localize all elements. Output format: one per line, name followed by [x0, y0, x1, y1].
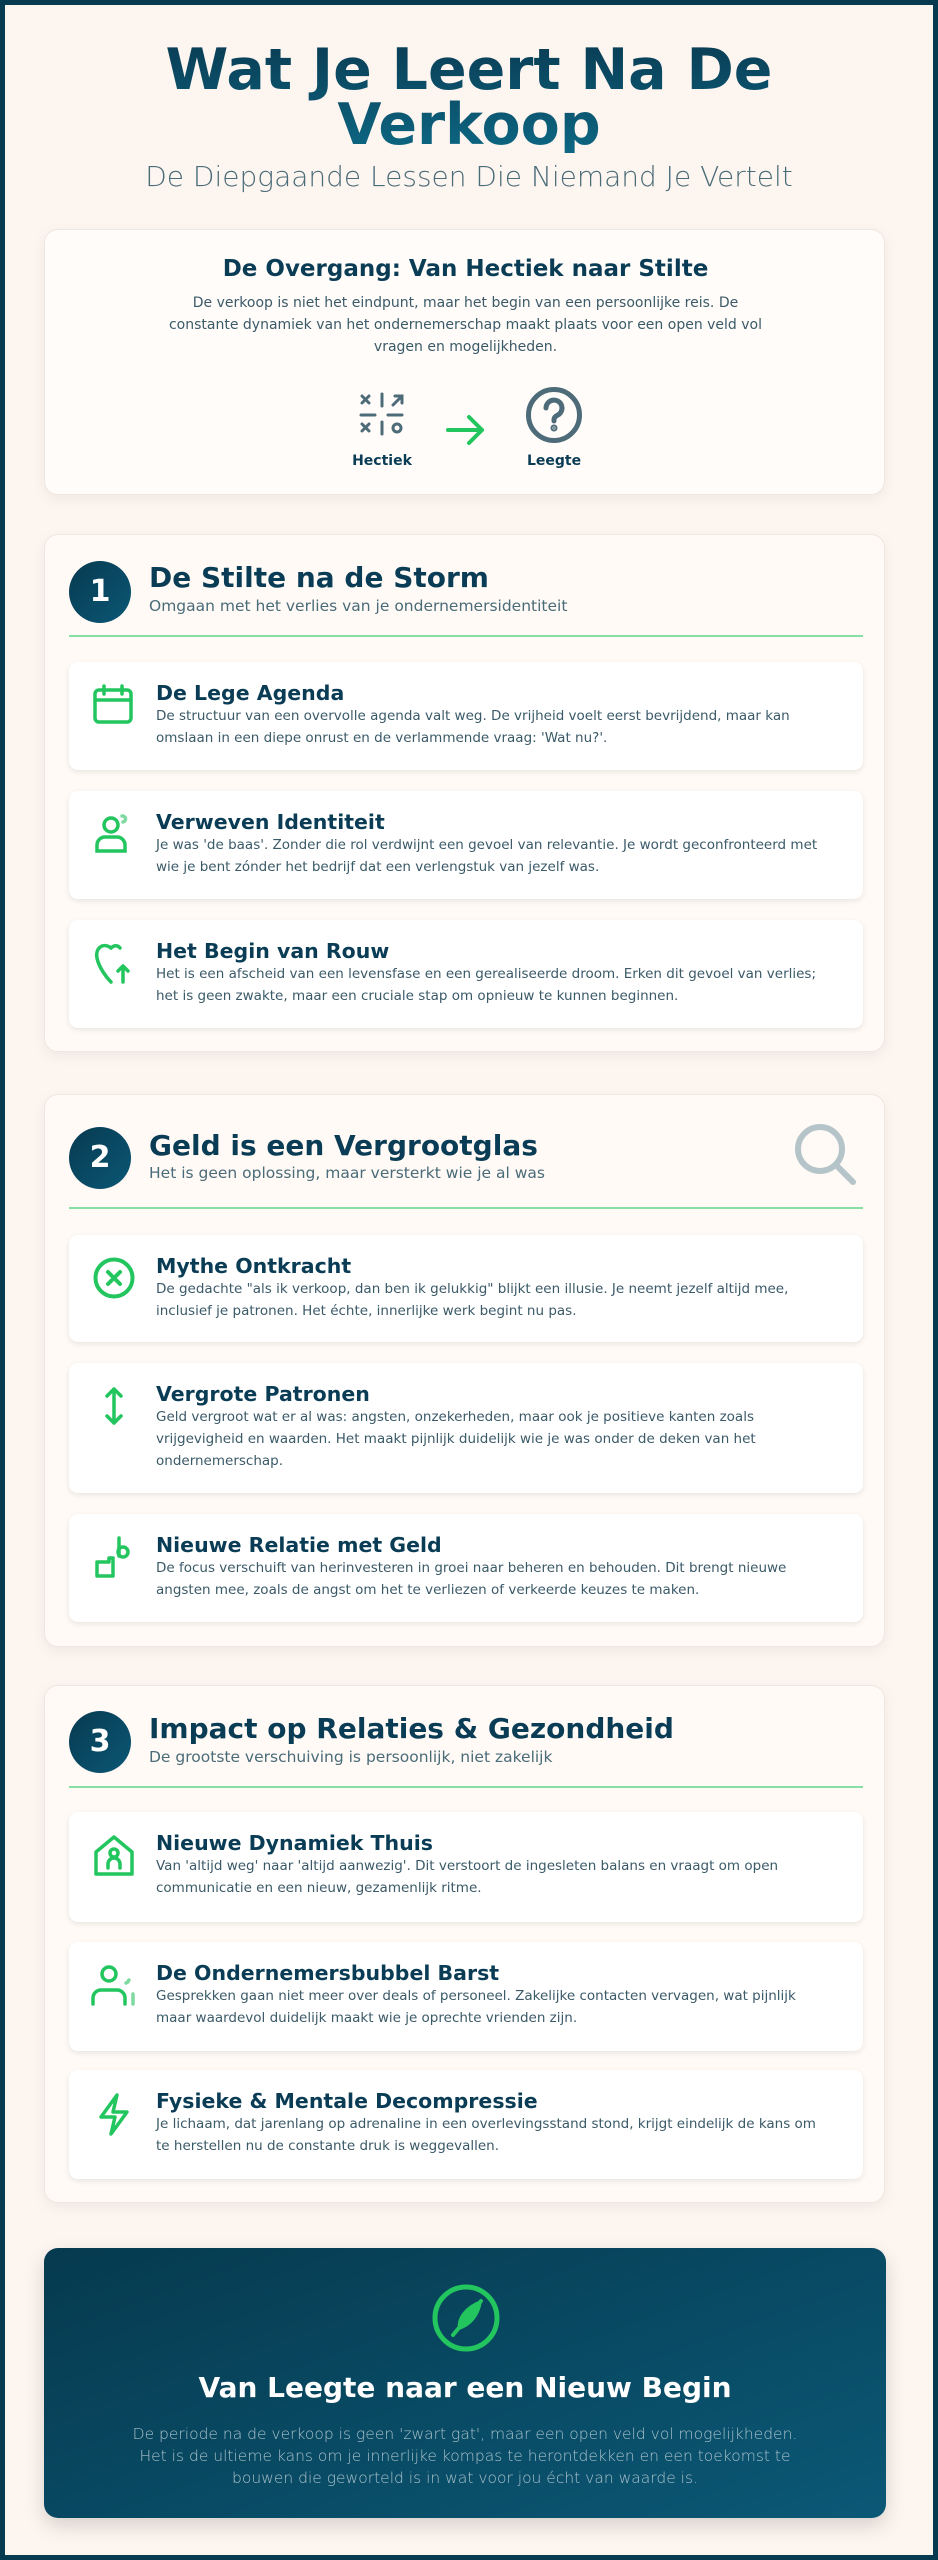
icon: hand coin — [95, 1536, 130, 1578]
icon: x circle — [94, 1258, 134, 1298]
icon: people — [91, 1965, 135, 2006]
item: nieuwe dynamiek thuis: communicatie en een nieuw, gezamenlijk ritme. — [156, 1880, 482, 1896]
conclusion text — [133, 2425, 797, 2487]
section 3 subtitle: De grootste verschuiving is persoonlijk, niet zakelijk — [149, 1748, 552, 1766]
item: begin van rouw: Het is een afscheid van een levensfase en een gerealiseerde droom. Erken dit gevoel van verlies; — [156, 966, 816, 982]
intro text — [169, 295, 762, 355]
icon: up-down arrow — [105, 1387, 123, 1425]
item: verweven identiteit — [69, 791, 863, 899]
item: decompressie — [69, 2070, 863, 2179]
icon: house — [94, 1835, 134, 1876]
item: verweven identiteit: wie je bent zónder het bedrijf dat een verlengstuk van jezelf was. — [156, 859, 599, 875]
item: ondernemersbubbel: Gesprekken gaan niet meer over deals of personeel. Zakelijke contacten vervagen, wat pijnlijk — [156, 1988, 796, 2004]
item: mythe ontkracht: Mythe Ontkracht — [156, 1254, 351, 1278]
number 2: 2 — [90, 1140, 110, 1175]
icon: magnifier — [795, 1124, 856, 1185]
panel: section 2 — [44, 1094, 885, 1647]
number 3: 3 — [90, 1724, 110, 1759]
item: vergrote patronen: Vergrote Patronen — [156, 1382, 370, 1406]
section 2 subtitle: Het is geen oplossing, maar versterkt wie je al was — [149, 1164, 545, 1182]
item: begin van rouw — [69, 920, 863, 1028]
item: mythe ontkracht: De gedachte "als ik verkoop, dan ben ik gelukkig" blijkt een illusie. Je neemt jezelf altijd mee, — [156, 1281, 788, 1297]
item: vergrote patronen: vrijgevigheid en waarden. Het maakt pijnlijk duidelijk wie je was onder de deken van het — [156, 1431, 756, 1447]
item: nieuwe relatie met geld: Nieuwe Relatie met Geld — [156, 1533, 442, 1557]
item: begin van rouw: het is geen zwakte, maar een cruciale stap om opnieuw te kunnen beginnen. — [156, 988, 678, 1004]
title: Verkoop — [337, 92, 601, 158]
label hectiek: Hectiek — [352, 453, 412, 469]
icon: hectiek — [360, 392, 404, 436]
section 1 title: De Stilte na de Storm — [149, 561, 489, 594]
subtitle: De Diepgaande Lessen Die Niemand Je Vertelt — [145, 160, 793, 193]
number 3 — [69, 1711, 131, 1773]
item: verweven identiteit: Je was 'de baas'. Zonder die rol verdwijnt een gevoel van relevantie. Je wordt geconfronteerd met — [156, 837, 817, 853]
item: nieuwe relatie met geld: De focus verschuift van herinvesteren in groei naar beheren en behouden. Dit brengt nieuwe — [156, 1560, 786, 1576]
number 1 — [69, 561, 131, 623]
number 2 — [69, 1127, 131, 1189]
icon: lightning — [99, 2093, 129, 2136]
item: nieuwe dynamiek thuis: Nieuwe Dynamiek Thuis — [156, 1831, 433, 1855]
conclusion text: De periode na de verkoop is geen 'zwart gat', maar een open veld vol mogelijkheden. — [133, 2425, 797, 2443]
item: nieuwe relatie met geld — [69, 1514, 863, 1622]
panel: intro transition — [44, 229, 885, 495]
item: vergrote patronen: Geld vergroot wat er al was: angsten, onzekerheden, maar ook je positieve kanten zoals — [156, 1409, 754, 1425]
item: nieuwe dynamiek thuis — [69, 1812, 863, 1922]
item: nieuwe relatie met geld: angsten mee, zoals de angst om het te verliezen of verkeerde keuzes te maken. — [156, 1582, 699, 1598]
item: nieuwe dynamiek thuis: Van 'altijd weg' naar 'altijd aanwezig'. Dit verstoort de ingesleten balans en vraagt om open — [156, 1858, 778, 1874]
panel: section 3 — [44, 1685, 885, 2203]
item: lege agenda: De structuur van een overvolle agenda valt weg. De vrijheid voelt eerst bevrijdend, maar kan — [156, 708, 790, 724]
number 1: 1 — [90, 574, 110, 609]
item: decompressie: Je lichaam, dat jarenlang op adrenaline in een overlevingsstand stond, krijgt eindelijk de kans om — [156, 2116, 816, 2132]
section 3 title: Impact op Relaties & Gezondheid — [149, 1712, 674, 1745]
label leegte: Leegte — [527, 453, 581, 469]
item: ondernemersbubbel: De Ondernemersbubbel Barst — [156, 1961, 499, 1985]
item: vergrote patronen: ondernemerschap. — [156, 1453, 283, 1469]
item: ondernemersbubbel: maar waardevol duidelijk maakt wie je oprechte vrienden zijn. — [156, 2010, 577, 2026]
arrow — [446, 414, 484, 446]
conclusion text: Het is de ultieme kans om je innerlijke kompas te herontdekken en een toekomst te — [139, 2447, 791, 2465]
item: verweven identiteit: Verweven Identiteit — [156, 810, 385, 834]
intro text: vragen en mogelijkheden. — [374, 339, 557, 355]
item: vergrote patronen — [69, 1363, 863, 1493]
item: lege agenda — [69, 662, 863, 770]
icon: feather circle — [432, 2284, 500, 2352]
title — [5, 43, 933, 153]
item: mythe ontkracht: inclusief je patronen. Het échte, innerlijke werk begint nu pas. — [156, 1303, 576, 1319]
icon: leegte — [526, 387, 582, 443]
item: begin van rouw: Het Begin van Rouw — [156, 939, 389, 963]
icon: broken heart — [94, 944, 130, 984]
item: decompressie: te herstellen nu de constante druk is weggevallen. — [156, 2138, 499, 2154]
conclusion text: bouwen die geworteld is in wat voor jou écht van waarde is. — [232, 2469, 698, 2487]
icon: calendar — [93, 684, 133, 724]
item: lege agenda: De Lege Agenda — [156, 681, 344, 705]
section 1 subtitle: Omgaan met het verlies van je ondernemersidentiteit — [149, 597, 567, 615]
item: ondernemersbubbel — [69, 1942, 863, 2051]
item: decompressie: Fysieke & Mentale Decompressie — [156, 2089, 538, 2113]
icon: person — [95, 814, 128, 853]
conclusion heading: Van Leegte naar een Nieuw Begin — [198, 2371, 732, 2404]
item: mythe ontkracht — [69, 1235, 863, 1342]
panel: section 1 — [44, 534, 885, 1052]
intro text: constante dynamiek van het ondernemerschap maakt plaats voor een open veld vol — [169, 317, 762, 333]
section 2 title: Geld is een Vergrootglas — [149, 1129, 538, 1162]
panel: conclusion — [44, 2248, 886, 2518]
intro text: De verkoop is niet het eindpunt, maar het begin van een persoonlijke reis. De — [193, 295, 738, 311]
intro heading: De Overgang: Van Hectiek naar Stilte — [223, 256, 708, 282]
item: lege agenda: omslaan in een diepe onrust en de verlammende vraag: 'Wat nu?'. — [156, 730, 607, 746]
title: Wat Je Leert Na De — [166, 37, 772, 103]
